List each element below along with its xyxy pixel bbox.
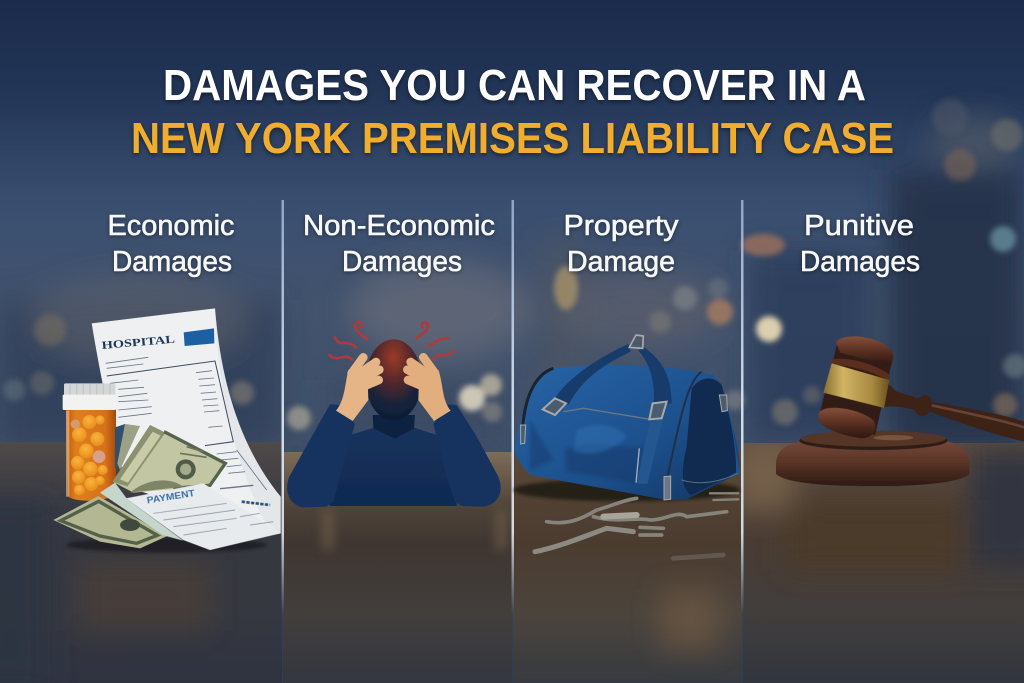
sound block base [776,431,969,486]
bag rim on right [710,375,740,478]
column divider lines [282,200,744,615]
heading: non-economic damages: Non-Economic [303,210,495,242]
torso [330,427,457,506]
heading: economic damages: Economic [108,210,234,242]
bag body [515,365,739,500]
left hand [336,357,379,421]
illustration: blue duffel bag with broken strap [513,335,740,558]
table surface [0,440,1024,683]
left arm [287,404,355,507]
handle highlight [932,405,1024,427]
stack of cash, upper [113,424,226,493]
metal clip and buckles [521,335,727,500]
gavel handle [884,384,1024,442]
heading: property damage: Damage [567,246,675,278]
heading: punitive damages: Punitive [804,210,914,242]
heading: punitive damages [800,210,920,278]
pain squiggles [329,322,454,360]
bag shading and highlights [530,420,643,483]
illustration: hospital bill, pills, cash and payment slip [53,308,281,552]
bag straps [555,344,672,484]
heading: economic damages [108,210,234,278]
broken chain debris [535,493,738,558]
heading: punitive damages: Damages [800,246,920,278]
right hand [407,357,451,421]
zippers and seams [523,368,738,483]
illustration: person holding head in pain [287,322,501,507]
title line 1: DAMAGES YOU CAN RECOVER IN A [163,61,866,110]
heading: property damage [564,210,679,278]
head and neck [366,339,422,439]
ground shadow [67,538,267,552]
bag dark end panel [683,379,736,495]
heading: property damage: Property [564,210,679,242]
heading: economic damages: Damages [112,246,232,278]
right arm [433,404,501,507]
title [131,61,894,163]
pill bottle [63,383,116,501]
payment receipt [100,483,281,550]
gavel head [819,336,893,438]
stack of cash, lower [53,496,167,548]
payment receipt: PAYMENT [146,488,196,505]
hospital bill paper [92,308,281,547]
bag shadow [513,479,740,501]
heading: non-economic damages [303,210,495,278]
heading: non-economic damages: Damages [342,246,462,278]
title line 2: NEW YORK PREMISES LIABILITY CASE [131,114,894,163]
hospital bill paper: HOSPITAL [101,334,175,352]
illustration: judge's gavel on sound block [776,336,1024,486]
